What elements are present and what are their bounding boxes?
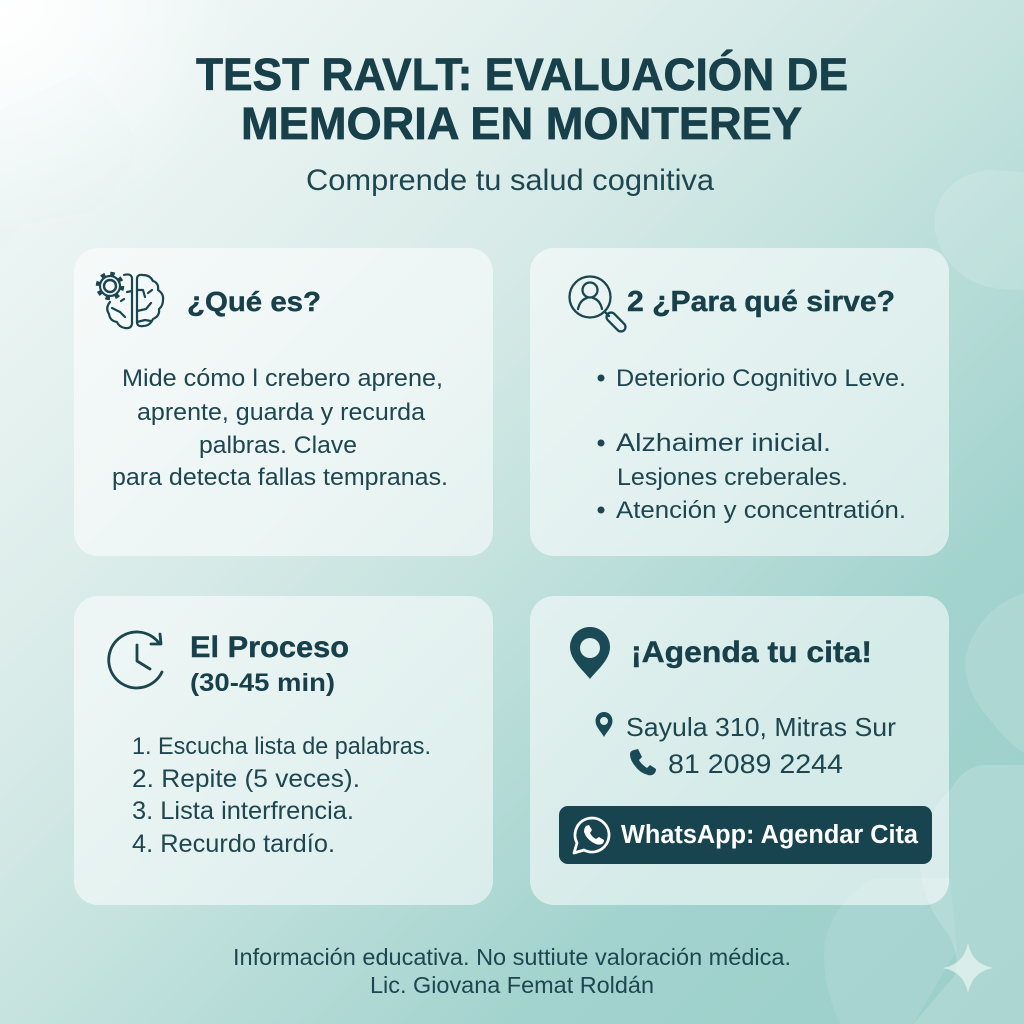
body text: aprente, guarda y recurda — [137, 399, 426, 426]
icon: magnifier with person — [570, 276, 627, 333]
bullet list: Alzhaimer inicial. — [616, 429, 831, 457]
heading — [190, 631, 349, 697]
heading: El Proceso — [190, 631, 349, 664]
panel: ¿Para qué sirve? — [530, 248, 949, 556]
title: MEMORIA EN MONTEREY — [241, 98, 802, 149]
phone number: 81 2089 2244 — [668, 749, 843, 779]
icon: clock with arrow — [109, 632, 162, 688]
numbered list: 4. Recurdo tardío. — [132, 830, 335, 858]
title — [196, 48, 848, 149]
numbered list — [132, 733, 431, 858]
panel: ¿Qué es? — [74, 248, 493, 556]
heading: 2 ¿Para qué sirve? — [627, 286, 895, 318]
icon: location pin — [570, 627, 610, 679]
bullet list — [598, 365, 906, 524]
footer: Información educativa. No suttiute valoración médica. — [233, 944, 791, 970]
body text: palbras. Clave — [199, 432, 357, 459]
footer — [233, 944, 791, 998]
footer: Lic. Giovana Femat Roldán — [370, 972, 654, 998]
body text: para detecta fallas tempranas. — [112, 464, 448, 491]
heading: (30-45 min) — [190, 669, 335, 697]
bullet list: Atención y concentratión. — [616, 497, 906, 524]
heading: ¿Qué es? — [187, 286, 321, 317]
small pin icon — [596, 712, 612, 737]
numbered list: 3. Lista interfrencia. — [132, 797, 354, 825]
button: WhatsApp: WhatsApp: Agendar Cita — [621, 821, 919, 849]
numbered list: 1. Escucha lista de palabras. — [132, 733, 431, 760]
panel: ¡Agenda tu cita! — [530, 596, 949, 905]
bullet list: Lesjones creberales. — [617, 464, 848, 491]
icon: brain with gear — [98, 274, 163, 328]
body text — [112, 365, 448, 491]
bullet list: Deteriorio Cognitivo Leve. — [616, 365, 906, 392]
phone icon — [630, 749, 656, 775]
address: Sayula 310, Mitras Sur — [626, 712, 896, 742]
title: TEST RAVLT: EVALUACIÓN DE — [196, 48, 848, 100]
icon: WhatsApp — [574, 818, 609, 853]
subtitle: Comprende tu salud cognitiva — [306, 164, 714, 197]
button: WhatsApp — [559, 806, 932, 864]
panel: El Proceso — [74, 596, 493, 905]
heading: ¡Agenda tu cita! — [631, 636, 872, 669]
numbered list: 2. Repite (5 veces). — [132, 765, 360, 793]
icon: sparkle — [943, 943, 993, 993]
body text: Mide cómo l crebero aprene, — [122, 365, 443, 392]
